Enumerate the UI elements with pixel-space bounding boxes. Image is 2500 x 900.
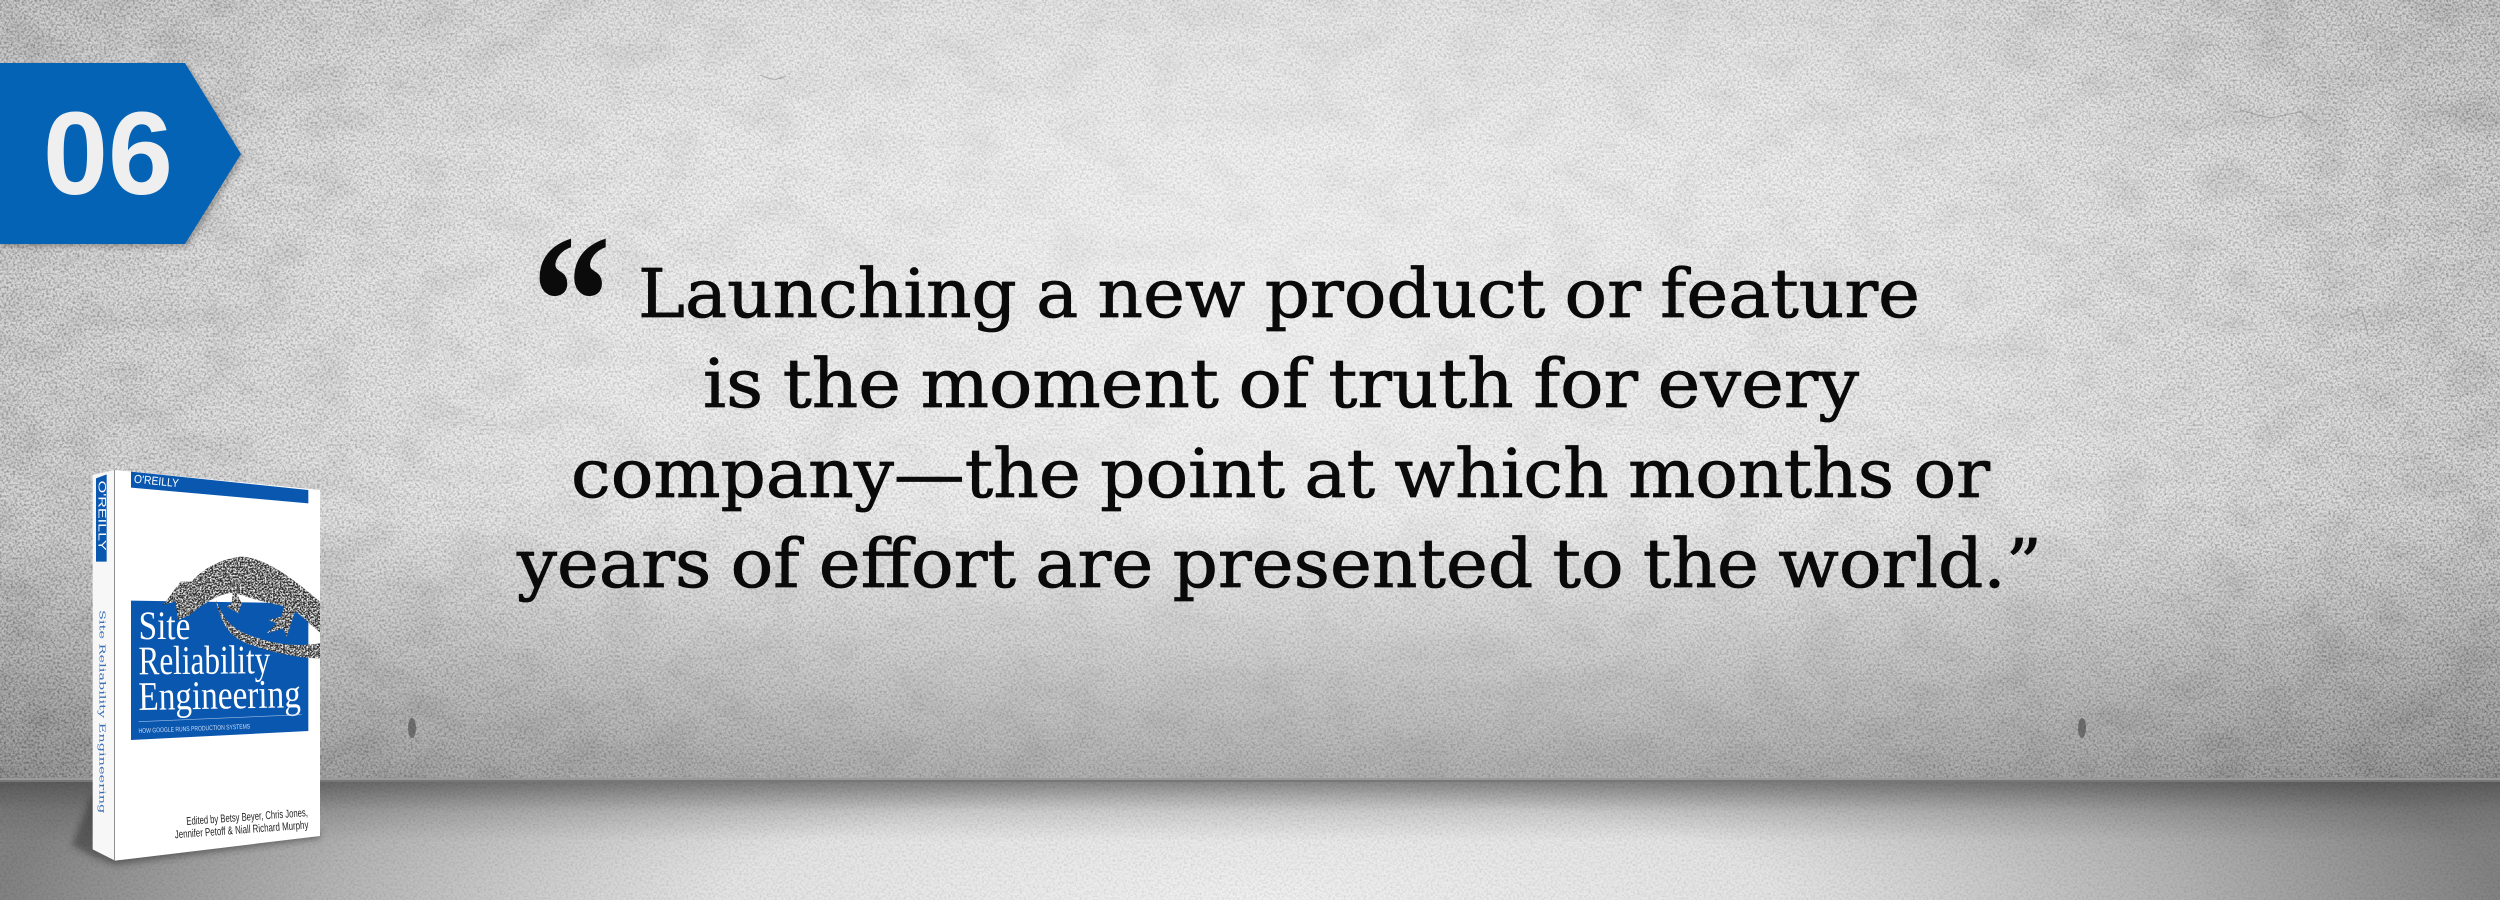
publisher band: O'REILLY bbox=[133, 473, 180, 490]
blue title panel: Site bbox=[139, 603, 190, 648]
book shadow bbox=[72, 793, 320, 865]
publisher band bbox=[131, 472, 308, 503]
editors credit: Jennifer Petoff & Niall Richard Murphy bbox=[174, 820, 309, 841]
blue title panel: Reliability bbox=[138, 637, 271, 683]
blue title panel: Engineering bbox=[138, 671, 301, 719]
background: concrete floor bbox=[0, 778, 2500, 900]
quote text bbox=[516, 255, 2042, 603]
opening quotation mark: “ bbox=[532, 195, 611, 406]
book spine: Site Reliability Engineering bbox=[97, 610, 106, 813]
quote text: Launching a new product or feature bbox=[638, 255, 1920, 333]
book spine: O'REILLY bbox=[96, 481, 108, 551]
editors credit bbox=[174, 807, 309, 841]
quote text: years of effort are presented to the world.” bbox=[516, 525, 2042, 603]
book cover bbox=[72, 470, 320, 865]
editors credit: Edited by Betsy Beyer, Chris Jones, bbox=[186, 807, 308, 828]
number badge bbox=[0, 63, 244, 247]
quote text: company—the point at which months or bbox=[571, 435, 1991, 513]
book front cover bbox=[115, 470, 320, 861]
badge number: 06 bbox=[43, 88, 173, 220]
lizard illustration bbox=[163, 557, 320, 658]
quote text: is the moment of truth for every bbox=[703, 345, 1859, 423]
blue title panel bbox=[131, 601, 308, 740]
book spine bbox=[93, 470, 115, 861]
blue title panel: HOW GOOGLE RUNS PRODUCTION SYSTEMS bbox=[138, 724, 251, 735]
